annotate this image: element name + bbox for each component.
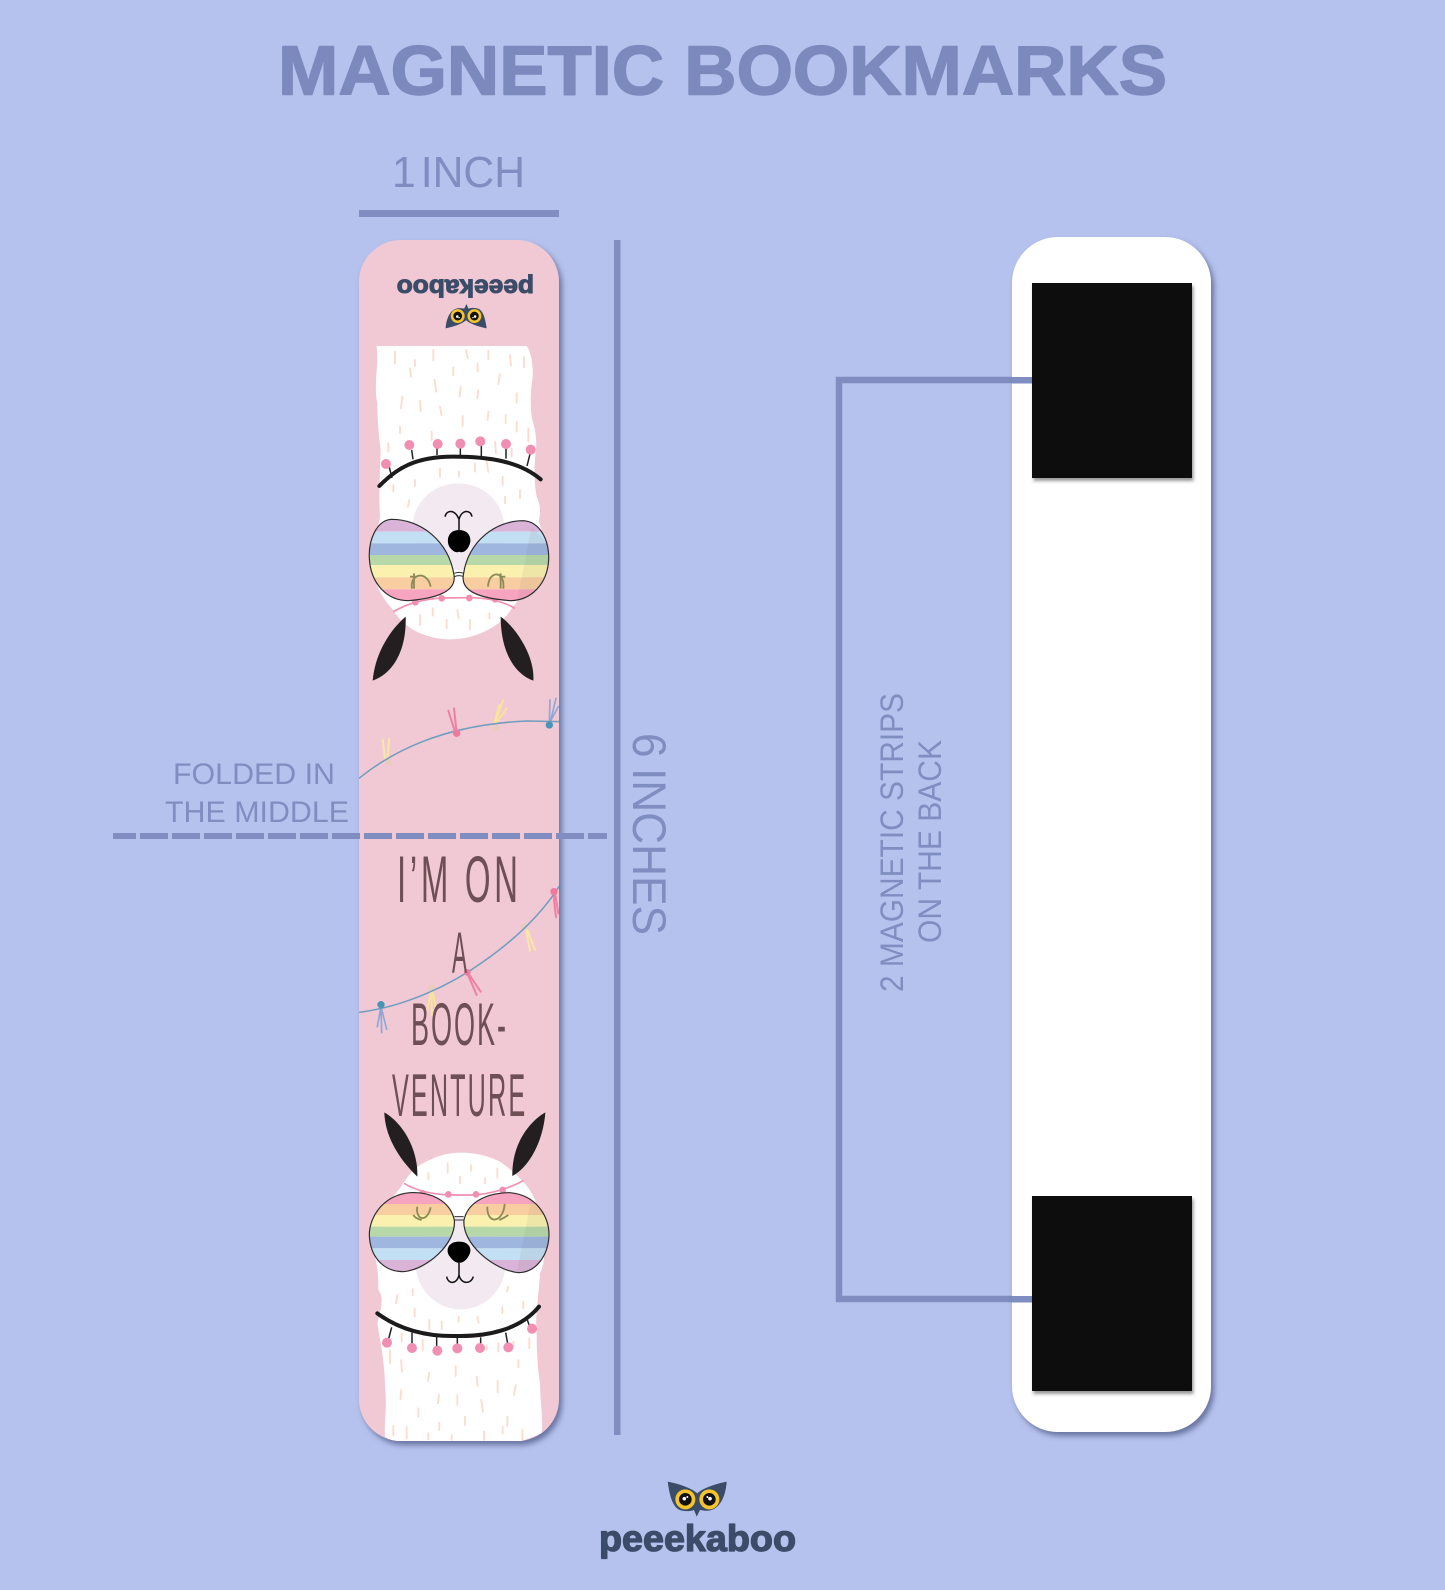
owl icon	[668, 1482, 727, 1517]
illustration: bottom llama with rainbow glasses	[367, 1112, 553, 1442]
quote text: I'm on a book-venture	[392, 844, 525, 1129]
panel: bookmark front	[359, 240, 560, 1442]
callout: 2 magnetic strips	[874, 693, 948, 992]
height dimension: 6 inches: 6 INCHES	[623, 733, 676, 935]
fold label: folded in the middle	[165, 758, 349, 829]
upside-down peeekaboo logo: peeekaboo	[397, 273, 534, 300]
left lens	[368, 1192, 456, 1272]
headband	[404, 1181, 523, 1198]
bottom magnetic strip	[1032, 1196, 1192, 1391]
nose and mouth	[447, 1242, 473, 1282]
necklace	[377, 1307, 539, 1356]
right lens	[462, 520, 550, 602]
title: MAGNETIC BOOKMARKS	[278, 32, 1167, 110]
glasses bridge	[454, 572, 464, 577]
glasses bridge	[454, 1217, 464, 1220]
white card	[1012, 237, 1211, 1432]
quote text: I'm on a book-venture: I’M ON	[397, 844, 518, 917]
right lens	[460, 1190, 553, 1274]
top magnetic strip	[1032, 283, 1192, 478]
artwork clipped to bookmark	[359, 273, 560, 1442]
left lens	[368, 518, 455, 602]
quote text: I'm on a book-venture: A	[452, 921, 467, 986]
headband	[393, 595, 515, 612]
height dimension: 6 inches	[614, 240, 676, 1435]
panel: bookmark back	[1012, 237, 1211, 1432]
bookmark base	[359, 240, 559, 1441]
necklace	[379, 436, 541, 486]
wordmark: peeekaboo	[599, 1517, 796, 1559]
quote text: I'm on a book-venture: BOOK-	[411, 991, 506, 1058]
infographic canvas	[113, 44, 1218, 1560]
fold label: folded in the middle: FOLDED IN	[173, 758, 335, 791]
quote text: I'm on a book-venture: VENTURE	[392, 1061, 525, 1129]
callout: 2 magnetic strips: 2 MAGNETIC STRIPS	[874, 693, 910, 992]
ears	[384, 1112, 545, 1177]
upside-down peeekaboo logo	[397, 273, 534, 328]
width dimension: 1 inch: 1 INCH	[392, 148, 525, 197]
ears	[373, 617, 533, 681]
bunting string one	[359, 698, 560, 778]
fold label: folded in the middle: THE MIDDLE	[165, 796, 349, 829]
illustration: top llama with rainbow glasses	[367, 346, 553, 681]
bunting string two	[359, 885, 560, 1033]
brand logo: peeekaboo	[599, 1482, 796, 1559]
dashed fold line	[113, 833, 607, 839]
callout: 2 magnetic strips: ON THE BACK	[912, 740, 948, 943]
bracket connecting the magnets	[839, 380, 1035, 1299]
bracket segment over card	[1012, 377, 1034, 1302]
nose and mouth	[445, 511, 472, 552]
width dimension: 1 inch	[359, 148, 559, 217]
